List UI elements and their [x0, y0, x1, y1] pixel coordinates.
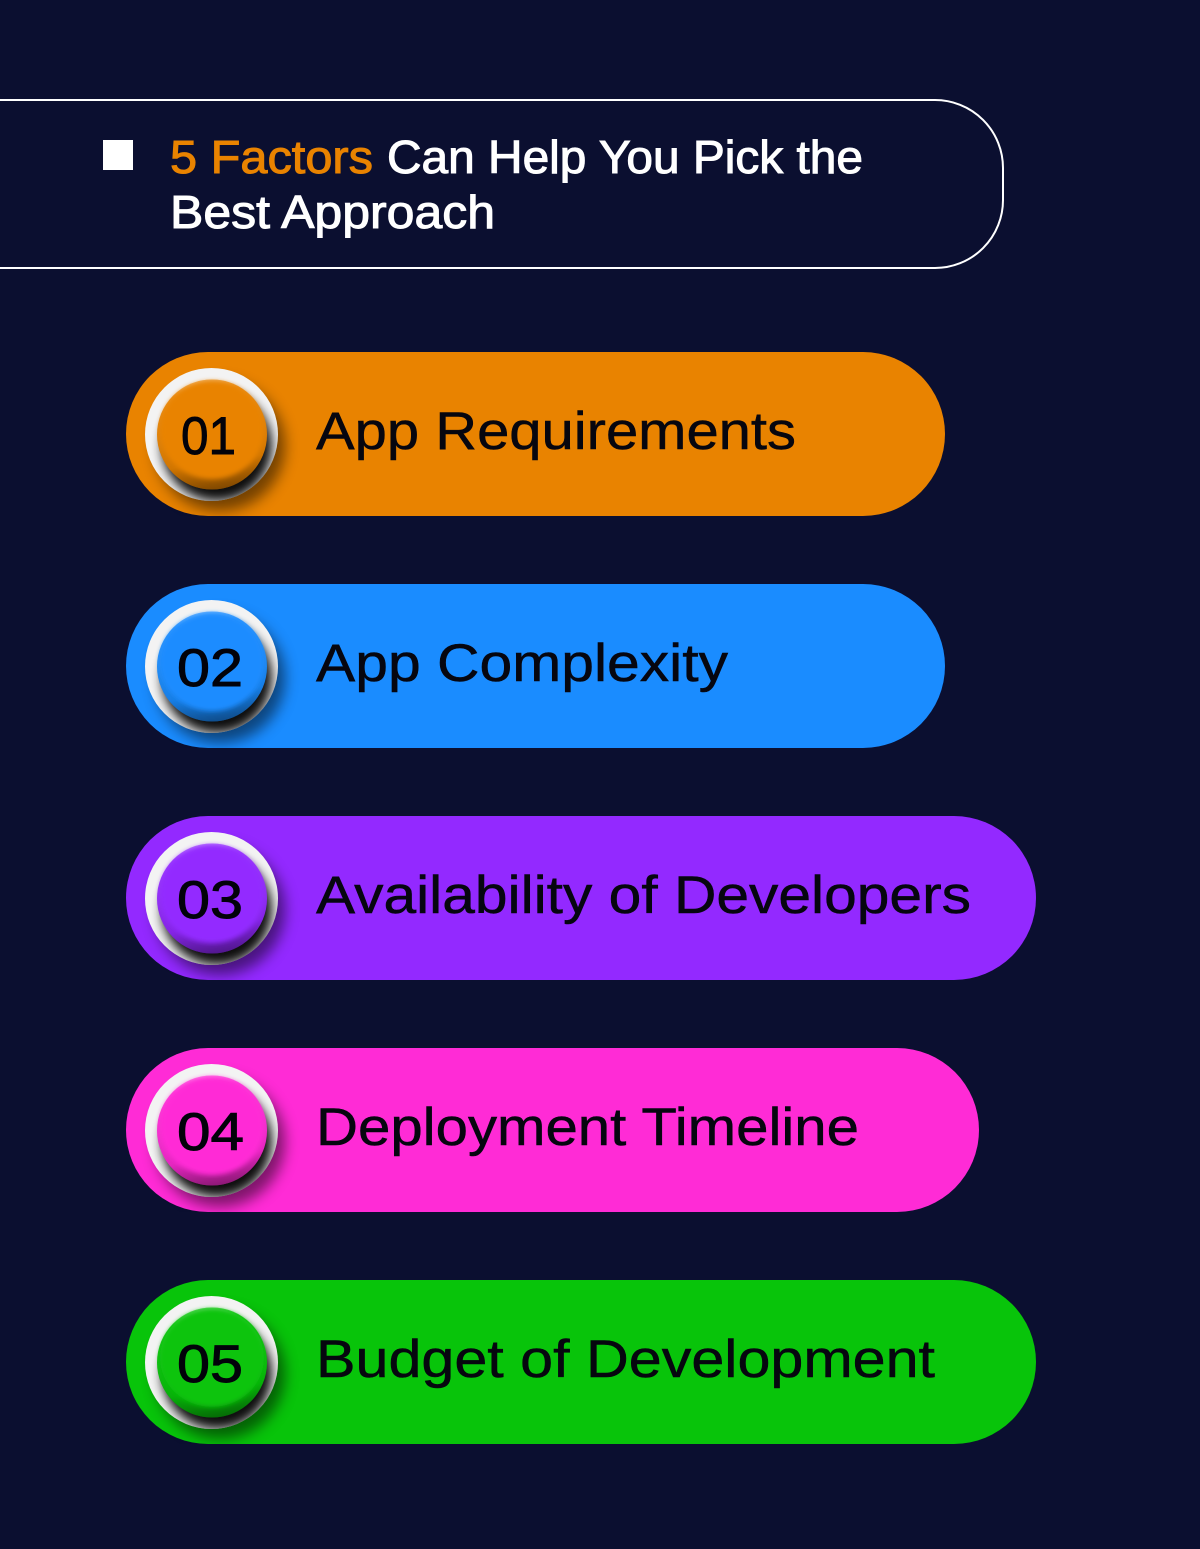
panel: 02 App Complexity — [126, 584, 945, 748]
header panel outline — [0, 100, 1003, 268]
button: 02: 02 — [177, 639, 243, 698]
button: 01 — [145, 368, 285, 511]
title: Best Approach — [170, 186, 495, 238]
button: 04 — [145, 1064, 285, 1207]
panel: 03 Availability of Developers — [126, 816, 1036, 980]
button: 05 — [145, 1296, 285, 1439]
button: 02 — [145, 600, 285, 743]
button: 03: 03 — [177, 871, 243, 930]
label: Deployment Timeline — [316, 1098, 859, 1157]
panel: 04 Deployment Timeline — [126, 1048, 979, 1212]
label: App Requirements — [316, 402, 796, 461]
panel: 01 App Requirements — [126, 352, 945, 516]
panel: 05 Budget of Development — [126, 1280, 1036, 1444]
title — [170, 131, 863, 238]
label: App Complexity — [316, 634, 729, 693]
title: Can Help You Pick the — [387, 131, 863, 183]
label: Budget of Development — [316, 1330, 935, 1389]
button: 04: 04 — [177, 1103, 244, 1162]
label: Availability of Developers — [316, 866, 971, 925]
button: 01: 01 — [181, 407, 236, 466]
icon: white square bullet — [103, 140, 133, 170]
title: 5 Factors — [170, 131, 373, 183]
button: 05: 05 — [177, 1335, 243, 1394]
button: 03 — [145, 832, 285, 975]
